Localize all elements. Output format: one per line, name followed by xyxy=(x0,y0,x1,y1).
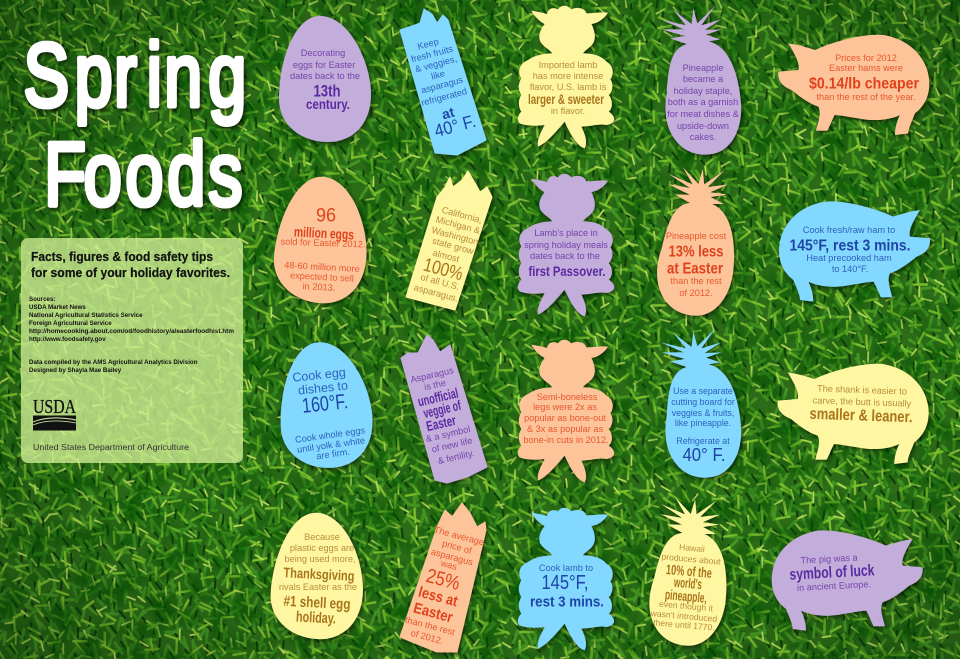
pig text: carve, the butt is usually xyxy=(813,395,912,409)
pig text: smaller & leaner. xyxy=(809,406,913,426)
pineapple text xyxy=(649,542,722,633)
asparagus text: Easter xyxy=(411,600,455,626)
pineapple card: cutting board xyxy=(661,329,741,478)
pig text: The shank is easier to xyxy=(817,383,907,397)
asparagus text: of 2012. xyxy=(410,628,444,646)
pineapple text: Use a separate xyxy=(673,386,733,396)
asparagus text: veggie of xyxy=(422,397,463,421)
pineapple text: 10% of the xyxy=(665,561,713,581)
asparagus text: almost xyxy=(432,248,461,264)
asparagus text: Easter xyxy=(425,412,458,434)
asparagus shape xyxy=(401,335,487,483)
pineapple shape xyxy=(638,491,743,651)
asparagus text xyxy=(410,36,478,141)
pig text xyxy=(790,225,910,274)
pig text: $0.14/lb cheaper xyxy=(809,76,919,92)
asparagus text: is the xyxy=(423,378,447,392)
egg text: 96 xyxy=(316,206,336,226)
egg text xyxy=(280,206,366,293)
egg text: dates back to the xyxy=(290,71,360,81)
subtitle: Facts, figures & food safety tips xyxy=(31,250,213,264)
asparagus card: 100 percent xyxy=(406,171,492,310)
lamb text: popular as bone-out xyxy=(524,413,606,423)
pineapple text: at Easter xyxy=(667,260,723,278)
pineapple text: even though it xyxy=(659,599,714,613)
egg text: million eggs xyxy=(294,223,355,243)
pineapple shape xyxy=(661,6,741,155)
asparagus text: fresh fruits xyxy=(410,44,454,64)
sources: Foreign Agricultural Service xyxy=(29,320,112,327)
lamb text: Lamb's place in xyxy=(534,228,598,238)
lamb text: dates back to the xyxy=(530,251,600,261)
lamb shape xyxy=(518,340,614,482)
subtitle: for some of your holiday favorites. xyxy=(31,266,230,280)
pineapple text xyxy=(667,63,739,142)
pineapple text: Pineapple xyxy=(683,63,723,73)
asparagus text: Asparagus xyxy=(409,365,455,385)
lamb text: bone-in cuts in 2012. xyxy=(523,435,609,445)
egg text: century. xyxy=(306,96,350,112)
lamb text: in flavor. xyxy=(551,106,585,116)
pig text: to 140°F. xyxy=(832,264,868,274)
pig text: Heat precooked ham xyxy=(806,253,892,263)
pineapple text: of 2012. xyxy=(679,288,713,298)
asparagus text: asparagus. xyxy=(413,282,459,304)
egg text: rivals Easter as the xyxy=(279,582,357,592)
subtitle xyxy=(31,250,230,280)
pig text: Prices for 2012 xyxy=(835,53,897,63)
pineapple text: became a xyxy=(683,74,724,84)
pineapple text: Refrigerate at xyxy=(676,436,730,446)
asparagus text: 25% xyxy=(424,565,462,595)
credits: Data compiled by the AMS Agricultural Analytics Division xyxy=(29,359,198,366)
asparagus text: 40° F. xyxy=(432,111,478,141)
asparagus text: Keep xyxy=(416,36,440,52)
asparagus text: than the rest xyxy=(404,615,456,638)
pineapple text xyxy=(666,231,727,298)
asparagus text: asparagus xyxy=(420,75,464,95)
pig text: Cook fresh/raw ham to xyxy=(803,225,895,235)
pineapple text: 13% less xyxy=(668,244,724,260)
egg text: 48-60 million more xyxy=(284,260,360,274)
egg shape xyxy=(278,340,374,470)
pineapple text: wasn't introduced xyxy=(649,608,718,624)
egg card: Thanksgiving xyxy=(268,510,368,642)
egg text: are firm. xyxy=(316,447,350,461)
pig card: symbol of luck xyxy=(772,530,923,631)
title: Spring Foods: Spring xyxy=(24,25,246,125)
asparagus text: state grow xyxy=(431,236,475,256)
title: Spring Foods xyxy=(24,25,246,224)
sources xyxy=(29,296,235,343)
pineapple text: than the rest xyxy=(670,276,722,286)
pig text: symbol of luck xyxy=(789,562,875,584)
pineapple text: veggies & fruits, xyxy=(672,408,734,418)
egg shape xyxy=(268,510,368,642)
egg text: Decorating xyxy=(301,48,345,58)
lamb card: first Passover xyxy=(518,174,614,316)
lamb shape xyxy=(518,508,614,650)
lamb card: semi-boneless legs xyxy=(518,340,614,482)
egg text: in 2013. xyxy=(302,281,336,293)
egg text: dishes to xyxy=(297,378,349,398)
asparagus text: & a symbol xyxy=(425,424,471,444)
pineapple shape xyxy=(661,329,741,478)
asparagus text: at xyxy=(440,104,456,122)
egg text: plastic eggs are xyxy=(290,543,354,553)
egg shape xyxy=(279,16,371,142)
lamb text: flavor, U.S. lamb is xyxy=(530,82,607,92)
asparagus text xyxy=(413,205,483,304)
lamb text xyxy=(523,392,609,445)
icon: USDA logo: USDA xyxy=(33,396,76,418)
asparagus text xyxy=(409,365,475,466)
asparagus shape xyxy=(406,171,492,310)
egg text: #1 shell egg xyxy=(283,593,351,613)
lamb text: spring holiday meals xyxy=(524,240,608,250)
egg text: Cook egg xyxy=(292,365,346,385)
egg text xyxy=(279,532,357,628)
egg text: being used more, xyxy=(284,554,356,564)
pineapple text: produces about xyxy=(661,551,722,567)
asparagus card: refrigerate xyxy=(400,9,486,155)
asparagus text: less at xyxy=(416,584,460,610)
asparagus text: unofficial xyxy=(416,385,460,409)
asparagus card: 25 percent less xyxy=(400,503,486,652)
egg text: 160°F. xyxy=(301,390,349,418)
pineapple text: for meat dishes & xyxy=(667,109,739,119)
egg text: eggs for Easter xyxy=(293,60,355,70)
pineapple card: Hawaii xyxy=(638,491,743,651)
panel: intro, sources and USDA credit xyxy=(21,238,243,463)
asparagus shape xyxy=(400,503,486,652)
asparagus card: unofficial veggie xyxy=(401,335,487,483)
sources: USDA Market News xyxy=(29,304,86,311)
asparagus text: refrigerated xyxy=(420,86,468,108)
asparagus text: & fertility. xyxy=(437,448,475,466)
lamb text: legs were 2x as xyxy=(533,402,597,412)
lamb card: imported lamb xyxy=(518,6,614,148)
asparagus shape xyxy=(400,9,486,155)
pineapple text: upside-down xyxy=(677,121,729,131)
pineapple text: Pineapple cost xyxy=(666,231,727,241)
egg text xyxy=(290,48,360,112)
egg text xyxy=(292,365,366,461)
pineapple text: both as a garnish xyxy=(668,97,738,107)
pineapple text: pineapple, xyxy=(664,586,708,606)
sources: National Agricultural Statistics Service xyxy=(29,312,143,319)
egg text: holiday. xyxy=(296,608,336,628)
pig text: than the rest of the year. xyxy=(816,92,916,102)
pineapple card: holiday staple xyxy=(661,6,741,155)
egg text: sold for Easter 2012. xyxy=(280,237,366,249)
pig text: 145°F, rest 3 mins. xyxy=(790,238,910,254)
agency name: United States Department of Agriculture xyxy=(33,442,189,452)
egg card: decorating eggs xyxy=(279,16,371,142)
credits: Designed by Shayla Mae Bailey xyxy=(29,367,122,374)
lamb card: cook lamb xyxy=(518,508,614,650)
lamb text xyxy=(524,228,608,279)
sources: http://www.foodsafety.gov xyxy=(29,336,106,343)
icon: USDA logo xyxy=(33,396,76,430)
asparagus text: 100% xyxy=(421,255,465,285)
asparagus text: of all U.S. xyxy=(419,272,461,292)
asparagus text: of new life xyxy=(431,435,473,455)
lamb text xyxy=(528,60,607,116)
egg text: Because xyxy=(304,532,340,542)
pig text xyxy=(809,383,913,426)
pineapple text xyxy=(671,386,735,465)
pig text xyxy=(789,552,875,593)
lamb shape xyxy=(518,174,614,316)
pig shape xyxy=(779,201,930,302)
pineapple text: cutting board for xyxy=(671,397,735,407)
pig shape xyxy=(778,35,929,135)
lamb text xyxy=(530,563,604,610)
pig card: ham prices xyxy=(778,35,929,135)
asparagus text: The average xyxy=(433,524,485,548)
egg text: until yolk & white xyxy=(296,435,366,455)
lamb text: 145°F, xyxy=(542,572,588,594)
egg text: Cook whole eggs xyxy=(294,425,366,445)
pig shape xyxy=(772,530,923,631)
egg shape xyxy=(270,173,374,307)
pig card: cook ham xyxy=(779,201,930,302)
lamb text: rest 3 mins. xyxy=(530,594,604,610)
egg text: 13th xyxy=(314,82,340,100)
pineapple text: world's xyxy=(673,574,703,592)
egg text: Thanksgiving xyxy=(283,564,355,584)
pig text xyxy=(809,53,919,102)
asparagus text: Michigan & xyxy=(435,214,481,236)
asparagus text: California, xyxy=(441,205,483,225)
egg text: expected to sell xyxy=(290,270,354,284)
lamb text: first Passover. xyxy=(528,263,606,279)
asparagus text: Washington xyxy=(430,225,480,247)
asparagus text: like xyxy=(430,68,446,82)
pig card: shank and butt xyxy=(778,364,929,464)
pig shape xyxy=(778,364,929,464)
lamb text: Semi-boneless xyxy=(537,392,598,402)
egg card: cook egg dishes xyxy=(278,340,374,470)
lamb text: Cook lamb to xyxy=(539,563,593,573)
lamb text: Imported lamb xyxy=(539,60,597,70)
pig text: The pig was a xyxy=(800,552,859,565)
lamb text: & 3x as popular as xyxy=(527,424,603,434)
pineapple text: Hawaii xyxy=(679,542,705,554)
asparagus text: price of xyxy=(441,538,473,556)
asparagus text: asparagus xyxy=(430,547,474,567)
asparagus text: & veggies, xyxy=(414,54,458,74)
pineapple text: 40° F. xyxy=(682,445,726,465)
egg card: 96 million eggs xyxy=(270,173,374,307)
title: Spring Foods: Foods xyxy=(44,124,242,224)
pig text: Easter hams were xyxy=(829,63,903,73)
asparagus text: was xyxy=(439,558,459,572)
pineapple text: cakes. xyxy=(690,132,716,142)
credits xyxy=(29,359,198,374)
lamb text: larger & sweeter xyxy=(528,91,604,107)
pineapple text: like pineapple. xyxy=(675,418,731,428)
lamb shape xyxy=(518,6,614,148)
asparagus text xyxy=(404,524,485,646)
pineapple shape xyxy=(645,161,750,321)
sources: http://homecooking.about.com/od/foodhistory/a/easterfoodhist.htm xyxy=(29,328,235,335)
pineapple card: 13 percent less xyxy=(645,161,750,321)
pineapple text: holiday staple, xyxy=(674,86,732,96)
lamb text: has more intense xyxy=(533,71,603,81)
sources: Sources: xyxy=(29,296,55,303)
pineapple text: there until 1770. xyxy=(653,617,715,633)
pig text: in ancient Europe. xyxy=(797,579,871,593)
